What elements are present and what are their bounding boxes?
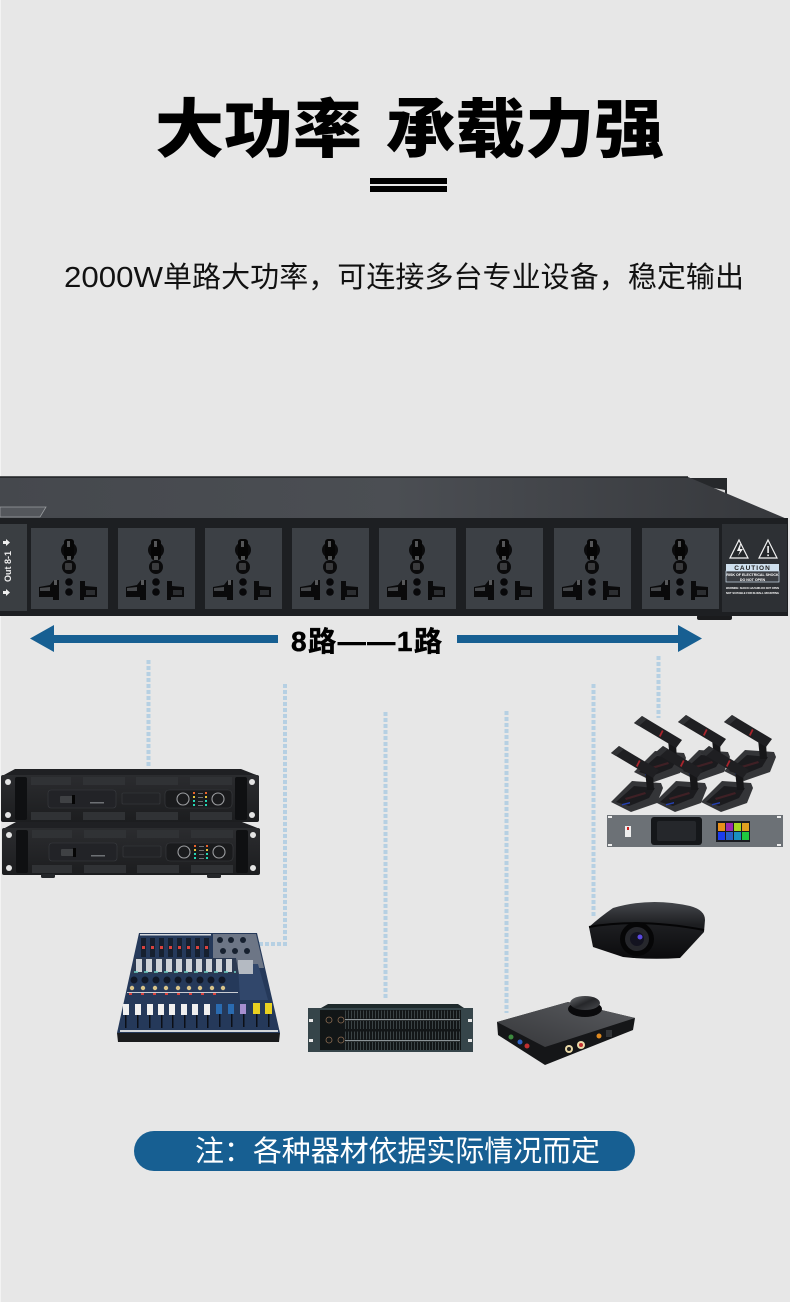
socket 7 xyxy=(551,520,634,616)
right arrow xyxy=(457,625,702,652)
socket 1 xyxy=(28,520,111,616)
socket 4 xyxy=(289,520,372,616)
conference microphones xyxy=(611,715,776,812)
rear bracket xyxy=(688,478,727,495)
warning panel: WARNING: SHOCK HAZARD-DO NOT OPEN xyxy=(726,586,779,590)
amplifier upper xyxy=(1,769,259,822)
socket 3 xyxy=(202,520,285,616)
logo plate on top xyxy=(0,507,46,517)
graphic equalizer xyxy=(308,1004,473,1052)
subtitle: 单路大功率，可连接多台专业设备，稳定输出 xyxy=(163,261,744,294)
title underline xyxy=(370,178,447,192)
back row microphones xyxy=(634,715,776,782)
socket 2 xyxy=(115,520,198,616)
power sequencer device xyxy=(0,477,788,620)
note pill xyxy=(134,1131,635,1171)
warning panel: NOT SUITABLE FOR IN-WALL MOUNTING xyxy=(726,591,780,595)
note pill: 注：各种器材依据实际情况而定 xyxy=(195,1135,600,1168)
left arrow xyxy=(30,625,278,652)
subtitle: 2000W xyxy=(64,262,164,294)
warning panel: CAUTION xyxy=(734,565,771,572)
rubber foot xyxy=(697,615,732,620)
title: 大功率 xyxy=(155,94,362,166)
warning panel: DO NOT OPEN xyxy=(740,578,765,582)
mixer EQ strip rows xyxy=(131,958,239,974)
device front face xyxy=(0,518,788,616)
device top surface xyxy=(0,477,787,519)
socket 6 xyxy=(463,520,546,616)
projector xyxy=(589,902,705,959)
front row microphones xyxy=(611,746,753,812)
socket 8 xyxy=(639,520,722,616)
USB sound card xyxy=(497,996,635,1065)
amplifier stack xyxy=(1,769,260,878)
warning panel xyxy=(722,524,787,612)
socket 5 xyxy=(376,520,459,616)
channel label 8路——1路: 8路——1路 xyxy=(291,626,442,657)
amplifier lower xyxy=(2,822,260,875)
output label panel: Out 8-1 xyxy=(3,551,13,582)
mixer xyxy=(117,933,280,1042)
title: 承载力强 xyxy=(386,94,664,166)
warning panel: RISK OF ELECTRICAL SHOCK xyxy=(726,573,779,577)
output label panel xyxy=(0,524,27,611)
conference host unit xyxy=(607,815,783,847)
title xyxy=(155,94,664,166)
dotted connector lines xyxy=(148,656,658,1013)
